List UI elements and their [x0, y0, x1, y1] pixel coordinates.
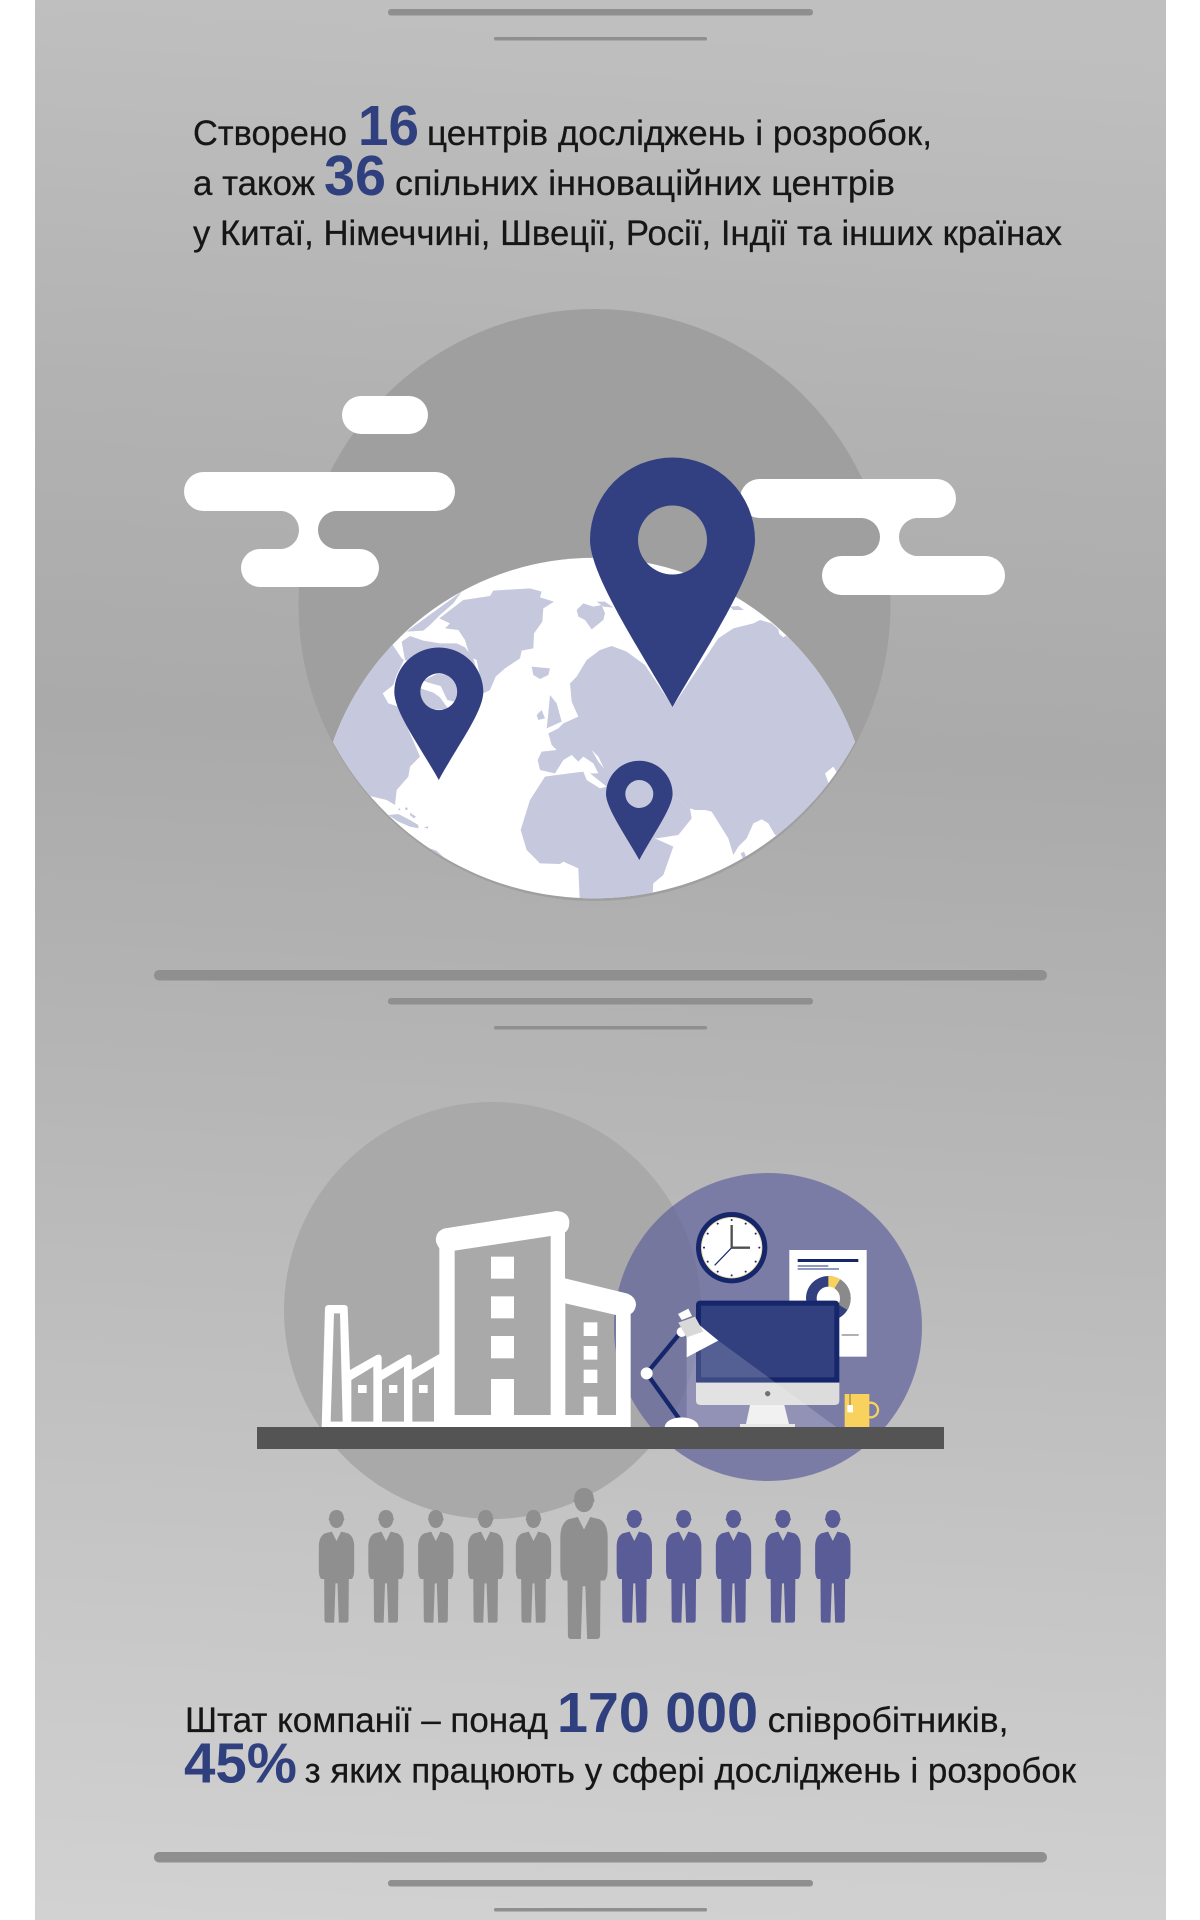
text block: staff numbers: з яких працюють у сфері досліджень і розробок	[305, 1752, 1077, 1790]
middle divider bars	[154, 970, 1047, 1030]
text block: staff numbers	[184, 1681, 1077, 1796]
text block: staff numbers: 170 000	[557, 1681, 758, 1745]
grey backdrop circle	[284, 1102, 701, 1519]
text block: research centres: а також	[193, 164, 316, 203]
circle overlap	[614, 1206, 673, 1427]
text block: staff numbers: Штат компанії – понад	[185, 1701, 548, 1740]
globe	[323, 558, 890, 907]
desk scene	[641, 1212, 878, 1427]
icon: left map pin	[394, 648, 483, 780]
icon: wall clock	[696, 1212, 767, 1283]
monitor	[696, 1301, 839, 1427]
shelf	[257, 1427, 944, 1449]
blue research staff figures	[617, 1510, 850, 1623]
icon: yellow mug	[845, 1394, 878, 1427]
purple backdrop circle	[614, 1173, 922, 1481]
big backdrop circle	[298, 309, 890, 901]
text block: research centres: спільних інноваційних центрів	[395, 164, 895, 203]
grey staff figures	[319, 1488, 608, 1639]
text block: research centres: у Китаї, Німеччині, Швеції, Росії, Індії та інших країнах	[193, 214, 1062, 253]
light beam	[687, 1341, 837, 1427]
top divider bars	[388, 9, 813, 40]
text block: research centres: 16	[358, 94, 419, 158]
globe illustration	[184, 309, 1005, 907]
document with donut chart	[789, 1250, 867, 1357]
office and factory illustration	[257, 1102, 944, 1519]
cloud: right	[740, 479, 1005, 595]
cloud: left	[184, 472, 455, 587]
text block: research centres: 36	[324, 144, 386, 208]
icon: small map pin	[606, 761, 673, 860]
cloud: small	[342, 396, 428, 434]
factory buildings	[322, 1211, 636, 1427]
text block: staff numbers: 45%	[184, 1732, 297, 1796]
text block: research centres	[193, 94, 1062, 253]
desk lamp	[641, 1309, 718, 1427]
icon: large map pin	[590, 458, 755, 707]
text block: research centres: центрів досліджень і розробок,	[427, 114, 932, 153]
text block: staff numbers: співробітників,	[768, 1701, 1009, 1740]
text block: research centres: Створено	[193, 114, 347, 153]
people row	[319, 1488, 850, 1639]
bottom divider bars	[154, 1852, 1047, 1912]
